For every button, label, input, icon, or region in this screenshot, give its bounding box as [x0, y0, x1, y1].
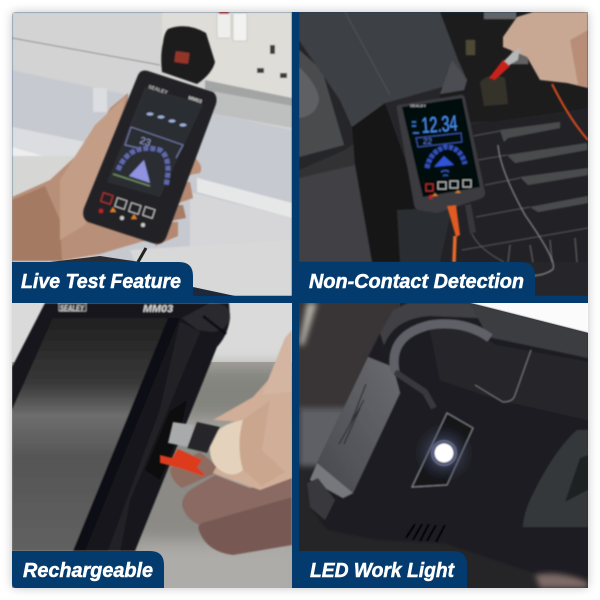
buttons [426, 180, 471, 191]
engraved logo [339, 384, 366, 444]
text: model: MM03 [143, 304, 173, 315]
photo: wall and socket [12, 12, 292, 296]
display: reading: 12.34 [421, 111, 458, 138]
icon: multimeter body [12, 303, 230, 551]
photo: background [12, 362, 292, 588]
icon: multimeter: SEALEY [147, 84, 169, 96]
icon: device body [307, 303, 588, 585]
label: Rechargeable: Rechargeable [23, 560, 153, 582]
display: arc of mode icons [427, 147, 465, 168]
cable [138, 248, 146, 262]
display: temperature box [125, 127, 183, 158]
icon: multimeter [397, 95, 485, 213]
speaker mesh [523, 430, 588, 527]
icon: multimeter: 22 [423, 137, 432, 146]
label: Non-Contact Detection: Non-Contact Detection [309, 271, 524, 293]
LED window [412, 413, 473, 487]
LED [434, 444, 454, 462]
photo: engine bay [299, 12, 588, 296]
icon: plug [161, 26, 215, 84]
display: dashes [146, 112, 186, 126]
panel: rechargeable [12, 303, 300, 600]
display: temperature box [416, 133, 462, 147]
label: Live Test Feature: Live Test Feature [21, 271, 181, 293]
panel: live test feature [12, 12, 292, 296]
test leads [447, 145, 553, 276]
vents [406, 524, 445, 542]
hand with USB-C cable [160, 330, 292, 555]
icon: multimeter: MM03 [187, 95, 203, 105]
hand with probe [489, 12, 588, 140]
label: LED Work Light: LED Work Light [310, 560, 455, 582]
USB-C plug [168, 422, 194, 447]
side grip panel [317, 357, 400, 493]
panel: LED work light [299, 303, 588, 588]
photo: background [299, 303, 588, 588]
red rubber cap [160, 449, 205, 476]
text: brand: SEALEY [60, 303, 85, 313]
display: arc of mode icons [118, 148, 168, 186]
rubber bumper rim [380, 303, 478, 345]
label: Non-Contact Detection [299, 262, 535, 296]
buttons [101, 193, 155, 218]
icon: multimeter: 23 [138, 135, 152, 149]
icon: multimeter: SEALEY [410, 103, 426, 108]
label: Live Test Feature [12, 262, 193, 296]
icon: warning triangle [129, 160, 150, 183]
panel: non-contact detection [299, 12, 588, 296]
hand holding meter [12, 93, 201, 261]
icon: warning triangle [434, 156, 454, 167]
label: LED Work Light [299, 551, 467, 588]
label: Rechargeable [12, 551, 164, 588]
icon: multimeter [83, 70, 217, 244]
